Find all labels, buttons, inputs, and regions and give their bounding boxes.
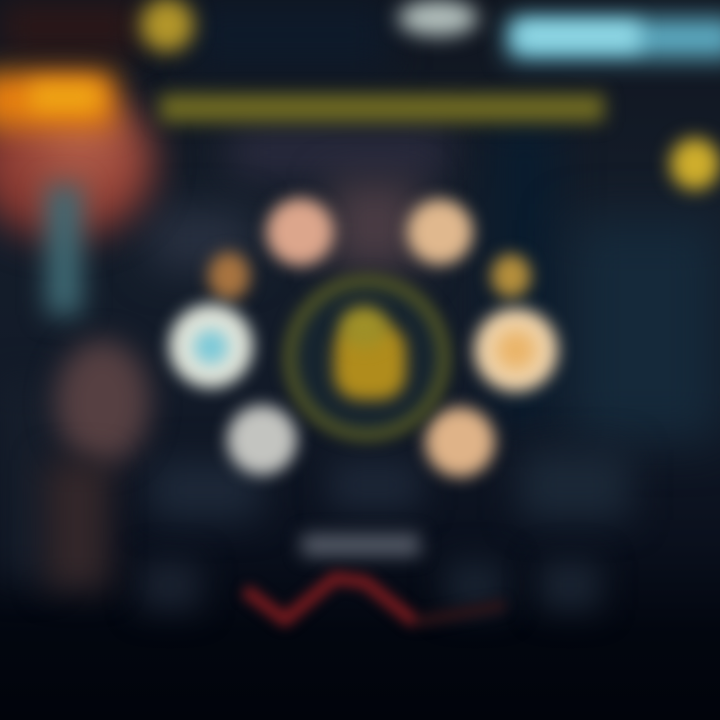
- icon: gold padlock body: [334, 324, 406, 400]
- icon: yellow circle at top: [140, 0, 194, 52]
- node centre: cyan: [194, 330, 228, 364]
- banner: cyan light at top right: [508, 18, 720, 58]
- shape: white glow at top: [398, 0, 478, 36]
- node: cream right with orange centre: [474, 308, 558, 392]
- title: blurred gold heading band: [160, 94, 604, 122]
- shape: teal column at left: [46, 185, 82, 315]
- figure: lower body: [45, 460, 110, 590]
- banner highlight: bright orange core: [30, 84, 100, 110]
- node: peach top left: [266, 198, 334, 266]
- node: peach top right: [407, 199, 473, 265]
- hub ring: olive: [283, 274, 451, 442]
- node: white left with cyan centre: [169, 304, 253, 388]
- banner: orange light at top left: [0, 72, 115, 128]
- node: grey lower left: [227, 405, 297, 475]
- node centre: orange: [496, 330, 536, 370]
- icon: padlock shackle: [340, 306, 388, 348]
- node: small orange left: [208, 252, 250, 300]
- label: grey blurred caption: [302, 534, 420, 556]
- figure: brown silhouette at left: [55, 340, 150, 465]
- node: peach lower right: [425, 407, 495, 477]
- icon: yellow circle at right: [670, 138, 720, 190]
- banner highlight: pale cyan core: [515, 22, 640, 50]
- diagram: circular hub with nodes: [156, 186, 570, 490]
- node: small gold right: [491, 254, 531, 298]
- shape: salmon glow at left: [0, 85, 155, 240]
